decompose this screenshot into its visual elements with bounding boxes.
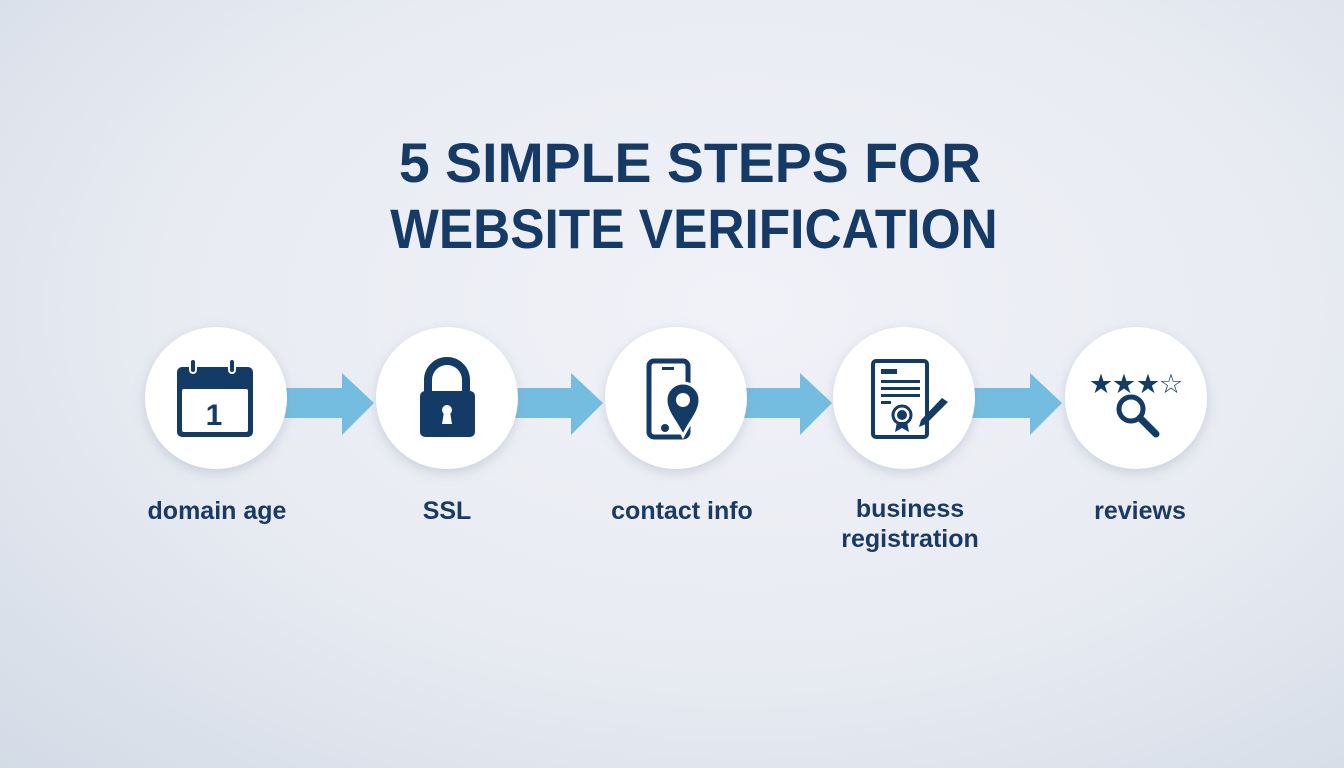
icon: phone with pin xyxy=(649,361,700,437)
label: business registration: registration xyxy=(841,525,979,553)
label: business registration xyxy=(841,495,979,553)
icon: stars and magnifier: ★ xyxy=(1112,369,1136,400)
arrow 3 xyxy=(740,373,832,435)
title xyxy=(390,131,998,260)
arrow 2 xyxy=(512,373,603,435)
icon: stars and magnifier: ★ xyxy=(1136,369,1160,400)
icon: stars and magnifier xyxy=(1089,369,1183,434)
circle 3: contact xyxy=(605,327,747,469)
title: 5 SIMPLE STEPS FOR xyxy=(399,131,981,194)
icon: stars and magnifier: ☆ xyxy=(1159,369,1183,400)
label: business registration: business xyxy=(856,495,964,523)
arrow 1 xyxy=(280,373,374,435)
label: reviews: reviews xyxy=(1094,497,1186,525)
circle 2: lock xyxy=(376,327,518,469)
label: contact info: contact info xyxy=(611,497,753,525)
label: domain age: domain age xyxy=(148,497,286,525)
icon: padlock xyxy=(420,361,475,437)
circle 4: registration xyxy=(833,327,975,469)
arrow 4 xyxy=(970,373,1062,435)
icon: certificate with pen xyxy=(873,361,948,437)
title: WEBSITE VERIFICATION xyxy=(390,197,998,260)
circle 5: reviews xyxy=(1065,327,1207,469)
icon: calendar xyxy=(177,359,253,437)
icon: stars and magnifier: ★ xyxy=(1089,369,1113,400)
label: SSL: SSL xyxy=(423,497,471,525)
icon: calendar: 1 xyxy=(206,399,222,432)
circle 1: calendar xyxy=(145,327,287,469)
